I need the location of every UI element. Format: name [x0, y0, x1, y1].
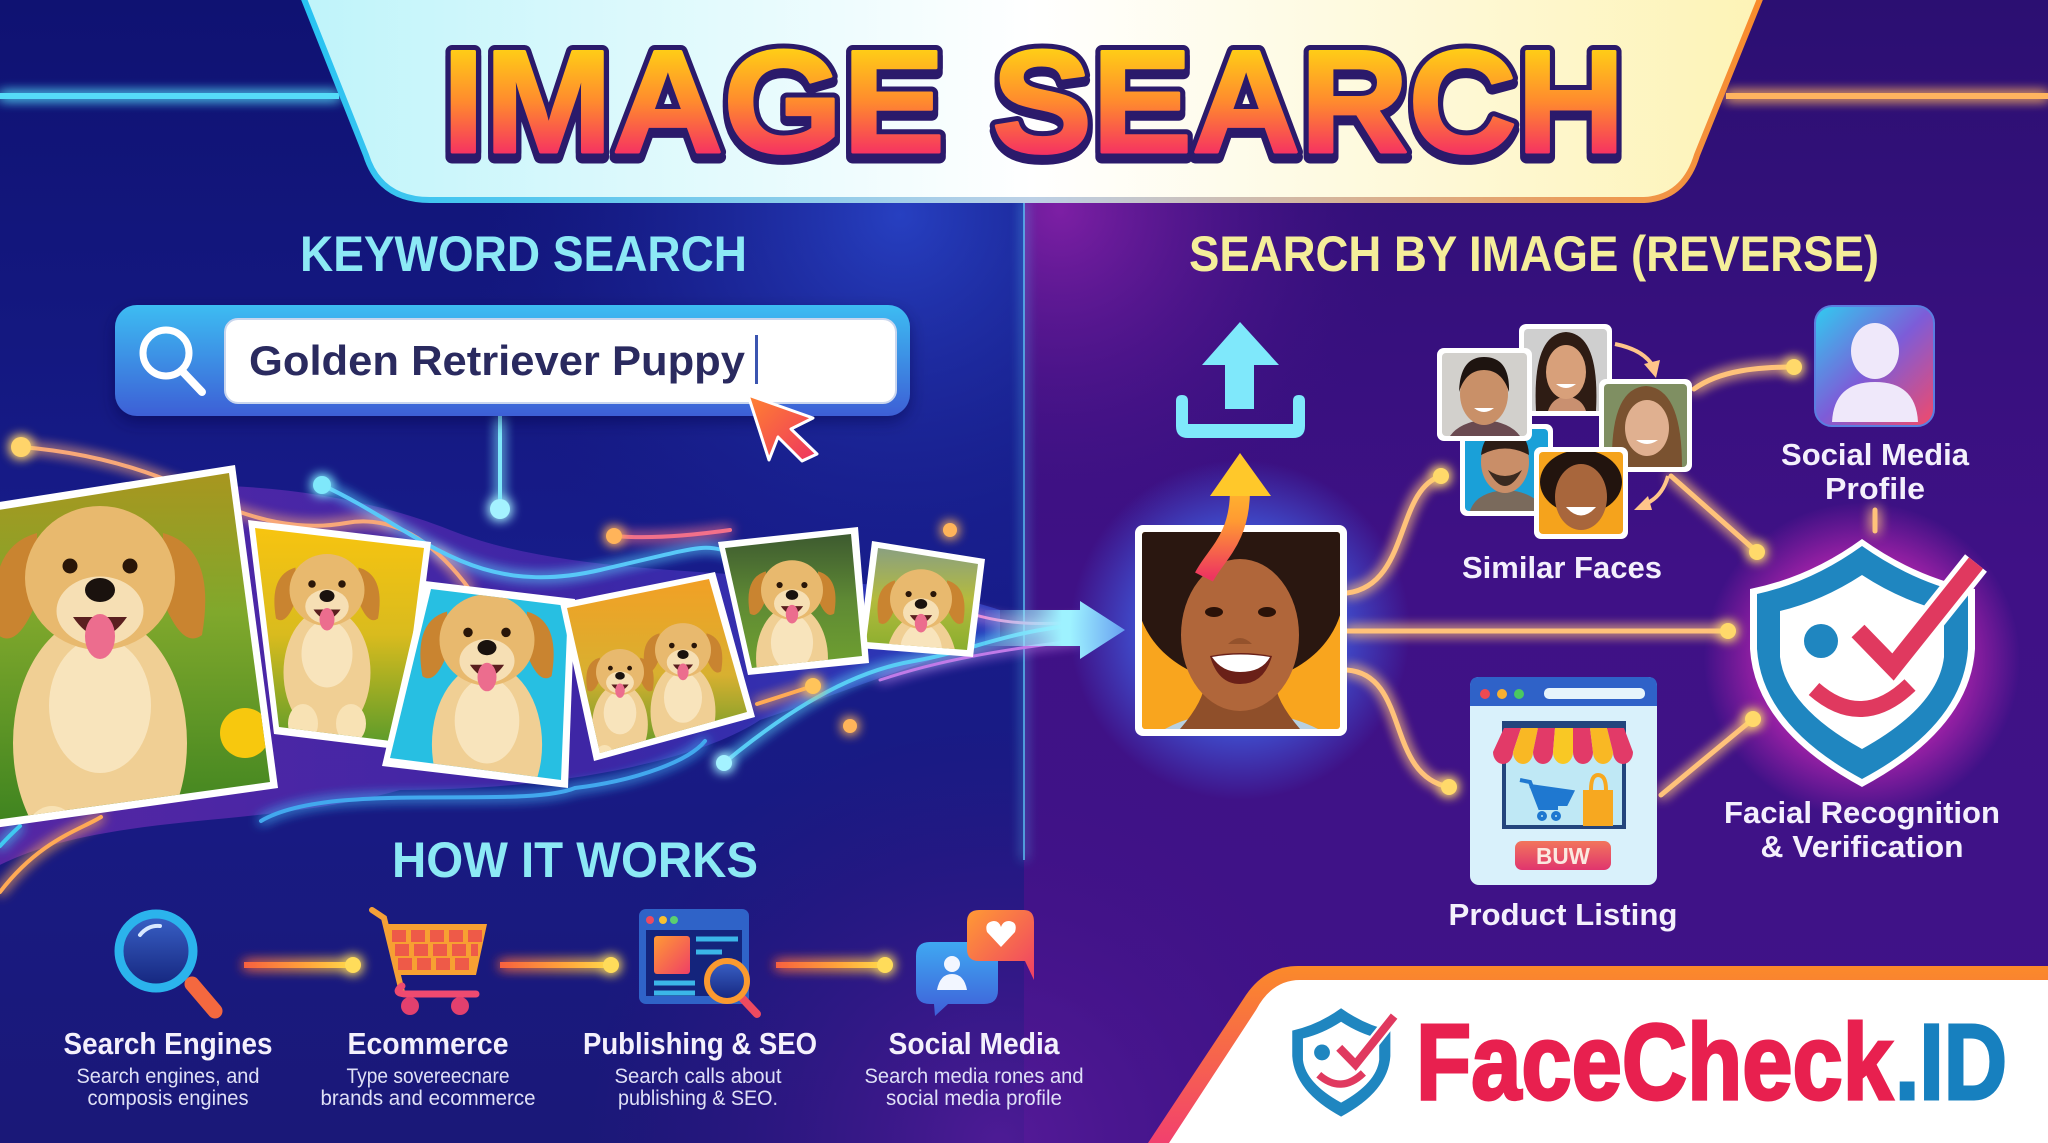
step: search engines: composis engines [88, 1087, 248, 1110]
connector: search bar to dot [490, 416, 510, 519]
label: social media profile [1781, 437, 1970, 506]
face: woman afro [1534, 447, 1628, 539]
icon: magnifier [119, 914, 215, 1011]
step: search engines: Search engines, and [76, 1065, 260, 1088]
flowing lines [0, 447, 1085, 892]
step: publishing and seo: Search calls about [614, 1065, 782, 1088]
step: search engines [64, 1026, 272, 1110]
photo: puppy 3 [382, 581, 575, 788]
label: facial recognition: Facial Recognition [1724, 795, 2000, 830]
photo: puppy 6 [864, 541, 985, 657]
photo: puppy 5 [718, 527, 869, 675]
icon: upload [1176, 322, 1305, 438]
title text: SEARCH [992, 20, 1625, 183]
logo wordmark: FaceCheck [1416, 1001, 1894, 1122]
small rotation arrows [1615, 344, 1668, 510]
curved arrow up from photo [1204, 453, 1271, 577]
title text: IMAGE [442, 20, 945, 183]
title text: SEARCH [992, 20, 1625, 183]
logo shield [1289, 1005, 1394, 1120]
glowing nodes [11, 437, 957, 771]
logo wordmark: .ID [1895, 1001, 2007, 1122]
icon: social bubbles [916, 910, 1034, 1016]
heading: keyword search: KEYWORD SEARCH [300, 226, 747, 282]
step: social media [864, 1026, 1084, 1110]
step: publishing and seo: publishing & SEO. [618, 1087, 778, 1110]
cart glyph [1520, 780, 1572, 819]
step: ecommerce: Ecommerce [348, 1026, 508, 1061]
search query text: Golden Retriever Puppy [249, 337, 746, 384]
title text: IMAGE [442, 25, 945, 188]
title banner [302, 0, 1762, 200]
big arrow to reverse search [985, 601, 1125, 659]
step: ecommerce [320, 1026, 536, 1110]
title text [442, 20, 1625, 188]
query face photo [1135, 525, 1347, 736]
step: ecommerce: Type sovereecnare [346, 1065, 510, 1088]
heading: search by image: SEARCH BY IMAGE (REVERSE) [1189, 226, 1879, 282]
search bar [115, 305, 910, 416]
search icon [143, 330, 202, 392]
step: search engines: Search Engines [64, 1026, 272, 1061]
mouse pointer [748, 395, 817, 461]
brand panel [1148, 966, 2048, 1143]
step: social media: social media profile [886, 1087, 1062, 1110]
photo: puppy 1 large [0, 465, 278, 828]
similar faces collage [1437, 324, 1692, 539]
face: man grey background [1437, 348, 1532, 441]
label: facial recognition: & Verification [1760, 829, 1964, 864]
connection nodes [1433, 359, 1802, 795]
step: social media: Search media rones and [864, 1065, 1084, 1088]
step: publishing and seo: Publishing & SEO [583, 1026, 817, 1061]
photo: two puppies [560, 572, 755, 770]
step: publishing and seo [583, 1026, 817, 1110]
label: social media profile: Social Media [1781, 437, 1970, 472]
step: social media: Social Media [888, 1026, 1060, 1061]
face: woman dark hair [1519, 324, 1612, 416]
awning [1493, 723, 1633, 764]
product listing card [1470, 677, 1657, 885]
label: facial recognition [1724, 795, 2000, 864]
title text: IMAGE [442, 20, 945, 183]
label: social media profile: Profile [1825, 471, 1925, 506]
text caret [755, 335, 758, 384]
face: woman long hair [1599, 379, 1692, 472]
store window [1504, 723, 1624, 827]
photo: puppy 2 [248, 520, 431, 750]
step: ecommerce: brands and ecommerce [320, 1087, 536, 1110]
side glow lines [0, 93, 2048, 99]
label: product listing: Product Listing [1448, 897, 1678, 932]
heading: how it works: HOW IT WORKS [392, 832, 758, 888]
label: similar faces: Similar Faces [1462, 550, 1662, 585]
buy button [1515, 841, 1611, 870]
bag glyph [1583, 775, 1613, 826]
glow behind query photo and shield [1050, 440, 2030, 830]
connection lines [1347, 367, 1875, 795]
buy button: BUW [1536, 843, 1590, 869]
swoosh band behind photos [0, 486, 1000, 870]
icon: publishing window [639, 909, 757, 1014]
title text: SEARCH [992, 25, 1625, 188]
icon: social media profile [1815, 306, 1934, 426]
step connectors [244, 957, 893, 973]
shield verification icon [1750, 539, 1976, 787]
icon: shopping cart [372, 910, 487, 1015]
face: man blue background [1460, 424, 1553, 516]
